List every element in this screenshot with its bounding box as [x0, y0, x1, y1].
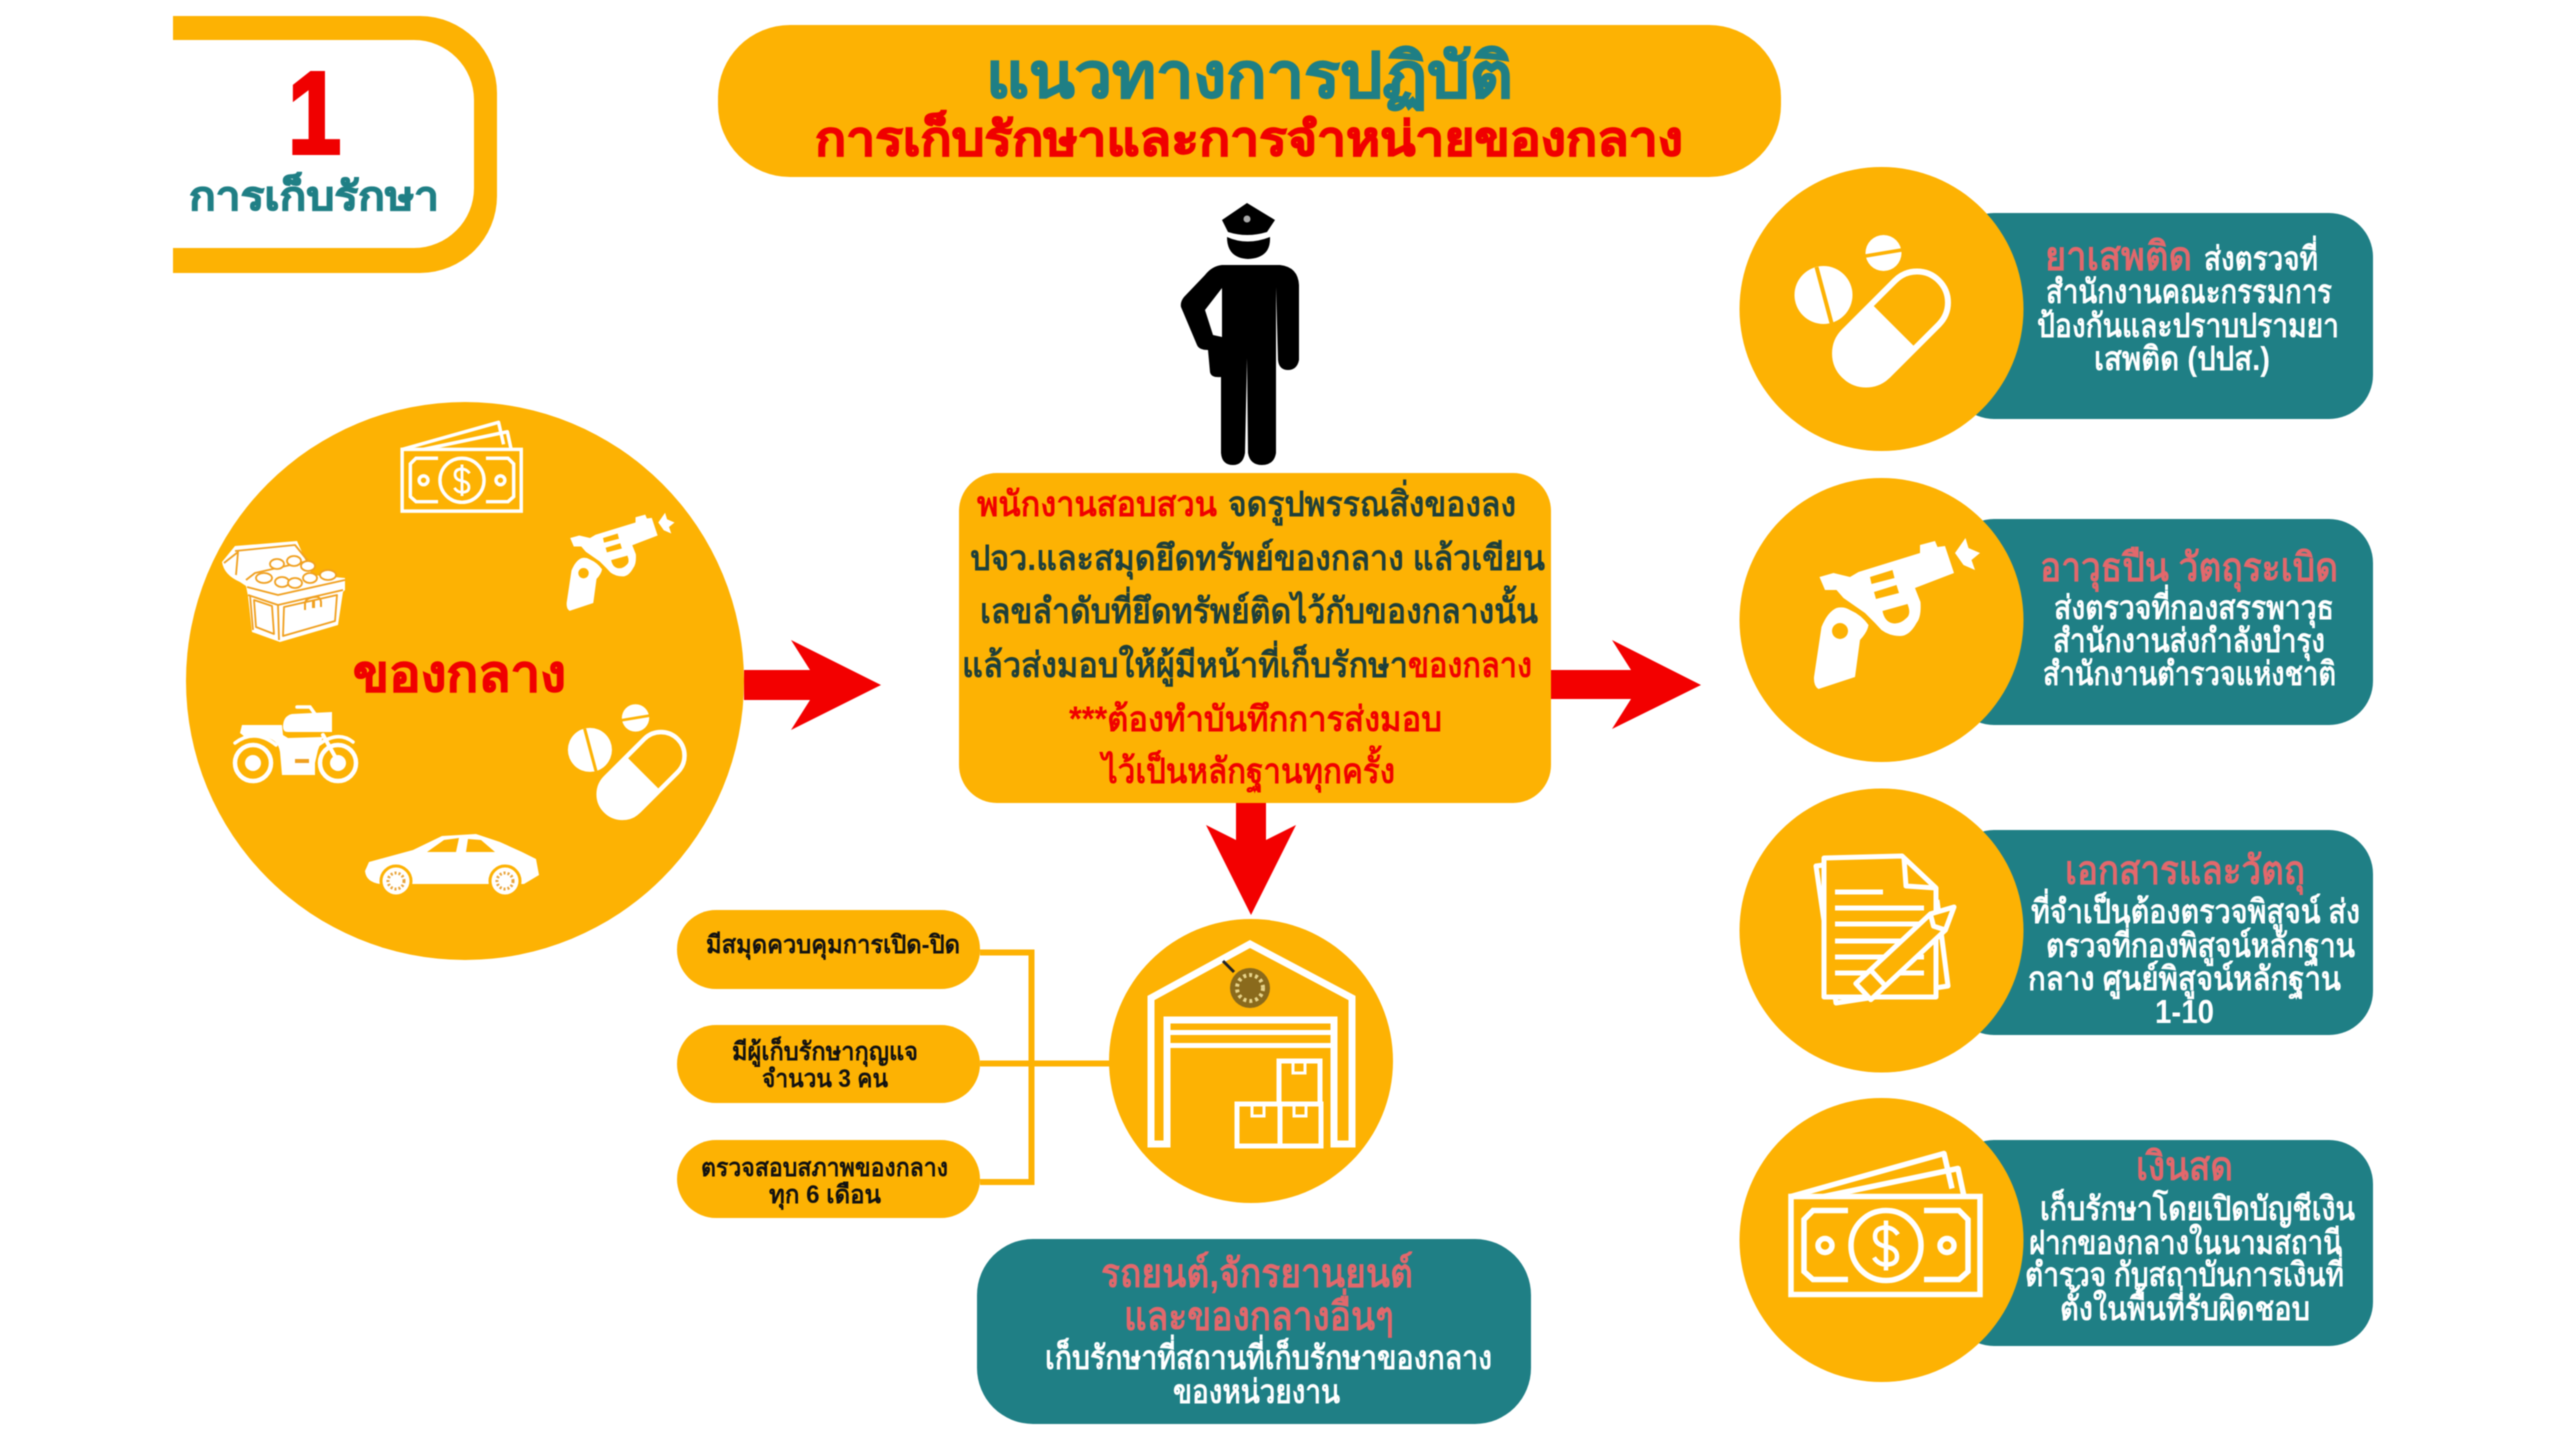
icon: pills small — [568, 704, 694, 828]
number 1: 1 — [288, 48, 341, 178]
pill: key keepers — [677, 1025, 980, 1103]
panel: vehicles and other evidence: ของหน่วยงาน — [1173, 1373, 1340, 1410]
panel: documents and objects: ที่จำเป็นต้องตรวจพิสูจน์ ส่ง — [2031, 888, 2360, 933]
badge: section 1 — [173, 16, 497, 273]
pill: six month check: ทุก 6 เดือน — [769, 1181, 881, 1211]
panel: narcotics — [1740, 167, 2373, 451]
panel: firearms and explosives: อาวุธปืน วัตถุระเบิด — [2040, 546, 2338, 593]
panel: narcotics: เสพติด (ปปส.) — [2094, 340, 2270, 377]
title banner — [718, 25, 1781, 177]
pill: key keepers: มีผู้เก็บรักษากุญแจ — [732, 1036, 918, 1068]
pill: open close log — [677, 910, 980, 989]
panel: documents and objects: เอกสารและวัตถุ — [2065, 849, 2305, 896]
pill: open close log: มีสมุดควบคุมการเปิด-ปิด — [706, 931, 960, 961]
panel: cash: เก็บรักษาโดยเปิดบัญชีเงิน — [2040, 1188, 2355, 1228]
icon: treasure chest — [222, 541, 345, 642]
badge label: การเก็บรักษา — [189, 171, 439, 219]
pill: six month check — [677, 1140, 980, 1218]
panel: vehicles and other evidence: และของกลางอื่นๆ — [1124, 1288, 1394, 1339]
icon: banknotes — [1791, 1154, 1980, 1294]
icon: gun — [1814, 538, 1980, 689]
panel: narcotics: สำนักงานคณะกรรมการ — [2046, 273, 2332, 310]
panel: vehicles and other evidence — [977, 1239, 1531, 1424]
icon: car — [365, 834, 539, 896]
seal emblem — [1223, 961, 1270, 1008]
pill: key keepers: จำนวน 3 คน — [762, 1065, 888, 1093]
icon: motorcycle — [235, 707, 356, 781]
panel: evidence circle — [186, 402, 744, 960]
panel: procedure box: เลขลำดับที่ยึดทรัพย์ติดไว้กับของกลางนั้น — [980, 585, 1538, 631]
connector lines — [980, 952, 1112, 1182]
icon: police officer — [1181, 203, 1299, 465]
panel: narcotics: ส่งตรวจที่ — [2204, 235, 2318, 277]
panel: documents and objects: ตรวจที่กองพิสูจน์หลักฐาน — [2046, 922, 2355, 967]
pill: six month check: ตรวจสอบสภาพของกลาง — [701, 1154, 948, 1182]
panel: procedure box: พนักงานสอบสวน — [977, 485, 1217, 524]
panel: procedure box: ***ต้องทำบันทึกการส่งมอบ — [1069, 700, 1442, 739]
panel: procedure box: แล้วส่งมอบให้ผู้มีหน้าที่เก็บรักษา — [962, 640, 1408, 687]
arrow: evidence to procedure — [744, 640, 881, 730]
panel: firearms and explosives — [1740, 478, 2373, 762]
panel: documents and objects: กลาง ศูนย์พิสูจน์หลักฐาน — [2028, 960, 2341, 1000]
panel: narcotics: ป้องกันและปราบปรามยา — [2037, 307, 2339, 344]
icon: gun small — [567, 513, 675, 611]
main title: แนวทางการปฏิบัติ — [986, 42, 1513, 111]
icon: money small — [402, 422, 521, 511]
panel: firearms and explosives: สำนักงานส่งกำลังบำรุง — [2053, 622, 2325, 662]
icon: pills — [1794, 235, 1961, 397]
label: ของกลาง — [353, 646, 566, 702]
panel: documents and objects — [1740, 788, 2373, 1072]
panel: vehicles and other evidence: รถยนต์,จักรยานยนต์ — [1101, 1251, 1413, 1296]
arrow: procedure to right column — [1551, 640, 1701, 729]
arrow: procedure to storage — [1206, 803, 1296, 915]
panel: cash: เงินสด — [2136, 1145, 2233, 1189]
panel: procedure box: จดรูปพรรณสิ่งของลง — [1228, 479, 1516, 526]
panel: cash: ตำรวจ กับสถาบันการเงินที่ — [2025, 1251, 2344, 1293]
panel: narcotics: ยาเสพติด — [2045, 235, 2192, 279]
panel: procedure box — [959, 473, 1551, 803]
subtitle: การเก็บรักษาและการจำหน่ายของกลาง — [815, 109, 1683, 165]
panel: cash: ตั้งในพื้นที่รับผิดชอบ — [2060, 1284, 2310, 1327]
panel: vehicles and other evidence: เก็บรักษาที่สถานที่เก็บรักษาของกลาง — [1045, 1334, 1492, 1376]
panel: firearms and explosives: สำนักงานตำรวจแห่งชาติ — [2043, 655, 2336, 692]
panel: documents and objects: 1-10 — [2155, 993, 2214, 1030]
icon: warehouse circle — [1109, 919, 1393, 1203]
panel: procedure box: ของกลาง — [1408, 646, 1532, 685]
panel: cash — [1740, 1098, 2373, 1382]
panel: procedure box: ปจว.และสมุดยึดทรัพย์ของกลาง แล้วเขียน — [970, 538, 1545, 580]
icon: document and pencil — [1816, 856, 1962, 1003]
panel: procedure box: ไว้เป็นหลักฐานทุกครั้ง — [1098, 745, 1395, 794]
panel: cash: ฝากของกลางในนามสถานี — [2029, 1223, 2342, 1261]
panel: firearms and explosives: ส่งตรวจที่กองสรรพาวุธ — [2054, 584, 2334, 629]
